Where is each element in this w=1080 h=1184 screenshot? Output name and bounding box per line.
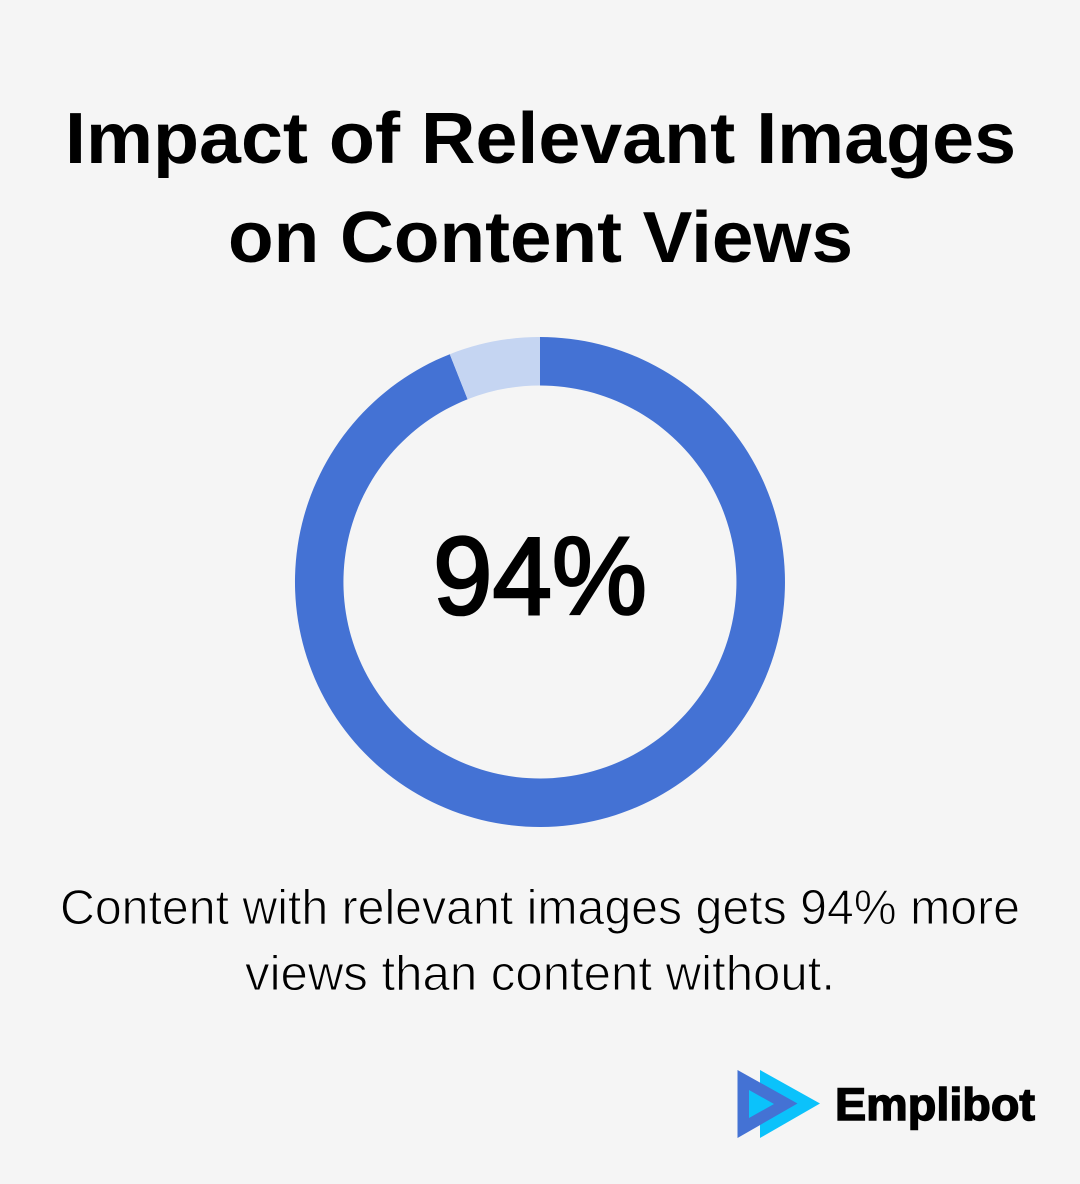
description text: views than content without. [245, 947, 835, 1001]
segment: remaining 6% [450, 337, 540, 399]
title [65, 99, 1016, 278]
center value: 94% [433, 515, 647, 638]
title: Impact of Relevant Images [65, 99, 1016, 179]
description text: Content with relevant images gets 94% more [60, 881, 1020, 935]
icon: play triangles [738, 1070, 820, 1138]
title: on Content Views [228, 198, 853, 278]
logo wordmark: Emplibot [835, 1079, 1035, 1130]
description text [60, 881, 1020, 1001]
segment: 94% share [295, 337, 785, 827]
donut chart: 94% [295, 337, 785, 827]
logo: Emplibot [738, 1070, 1035, 1138]
